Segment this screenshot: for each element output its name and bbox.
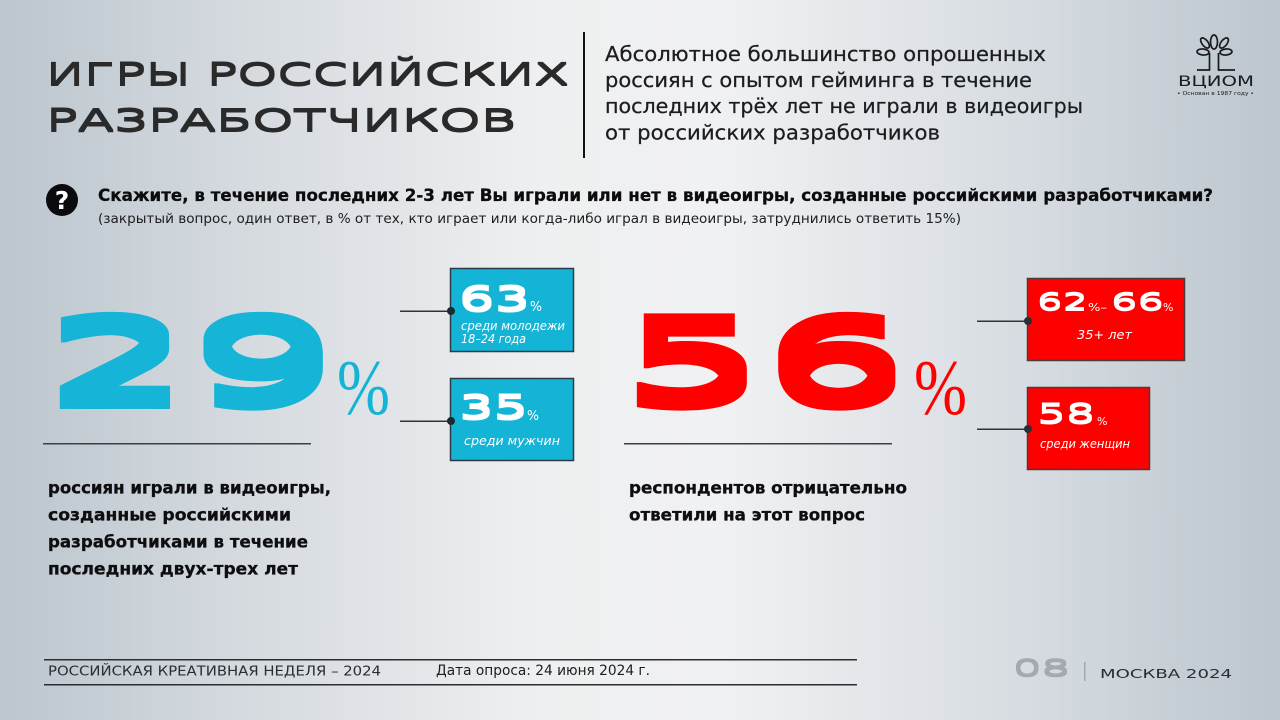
percent sign: % [337,344,390,431]
question text: Скажите, в течение последних 2-3 лет Вы играли или нет в видеоигры, созданные российскими разработчиками? [98,186,1213,205]
headline text: россиян с опытом гейминга в течение [605,68,1032,92]
callout: 63 percent youth: 63 [459,280,530,318]
callout: 63 percent youth: среди молодежи [461,319,565,333]
description [629,478,907,524]
callout: 62-66 percent aged 35+: 62 [1037,290,1088,316]
page number and place: МОСКВА 2024 [1100,666,1232,681]
callout: 58 percent women: % [1097,415,1107,428]
callout: 62-66 percent aged 35+: 66 [1111,290,1164,316]
headline text: от российских разработчиков [605,120,940,144]
panel: 56 percent did not play [622,278,1184,524]
title: ИГРЫ РОССИЙСКИХ [46,57,569,93]
icon: tree [1197,35,1235,70]
big number 56: 56 [622,299,908,429]
page number and place [1013,657,1232,682]
headline text: Абсолютное большинство опрошенных [605,42,1046,66]
callout: 58 percent women: среди женщин [1040,437,1130,451]
title [46,57,569,139]
icon: question mark: ? [55,186,69,215]
callout: 63 percent youth: % [530,300,542,315]
callout: 58 percent women: 58 [1037,399,1095,430]
footer: event and survey date: Дата опроса: 24 июня 2024 г. [436,663,650,679]
page number and place: 08 [1013,657,1070,682]
description: ответили на этот вопрос [629,506,865,524]
big number 29: 29 [45,299,337,429]
logo: ВЦИОМ: ВЦИОМ [1178,74,1254,90]
question text: (закрытый вопрос, один ответ, в % от тех, кто играет или когда-либо играл в видеоигры, затруднились ответить 15%) [98,211,961,227]
headline text: последних трёх лет не играли в видеоигры [605,94,1083,118]
percent sign: % [914,344,967,431]
callout: 35 percent men: % [527,409,539,424]
description: россиян играли в видеоигры, [48,478,331,498]
callout: 62-66 percent aged 35+: %– [1088,301,1107,314]
callout: 35 percent men [400,378,574,460]
description: респондентов отрицательно [629,478,907,498]
icon: question mark [46,184,78,216]
footer: event and survey date: РОССИЙСКАЯ КРЕАТИВНАЯ НЕДЕЛЯ – 2024 [48,662,381,680]
callout: 35 percent men: среди мужчин [464,434,560,448]
description: последних двух-трех лет [48,560,298,578]
description: разработчиками в течение [48,532,308,552]
callout: 63 percent youth: 18–24 года [461,332,526,346]
description: созданные российскими [48,506,291,524]
footer: event and survey date [44,659,857,686]
callout: 62-66 percent aged 35+: % [1163,301,1173,314]
callout: 62-66 percent aged 35+ [977,278,1184,360]
description [48,478,331,578]
logo: ВЦИОМ [1177,35,1254,97]
callout: 35 percent men: 35 [459,388,528,426]
callout: 62-66 percent aged 35+: 35+ лет [1077,328,1133,342]
panel: 29 percent played [43,268,574,578]
callout: 63 percent youth [400,268,574,352]
headline text [605,42,1083,144]
callout: 58 percent women [977,388,1150,470]
logo: ВЦИОМ: • Основан в 1987 году • [1177,91,1254,97]
question text [98,186,1213,227]
title: РАЗРАБОТЧИКОВ [46,104,517,139]
